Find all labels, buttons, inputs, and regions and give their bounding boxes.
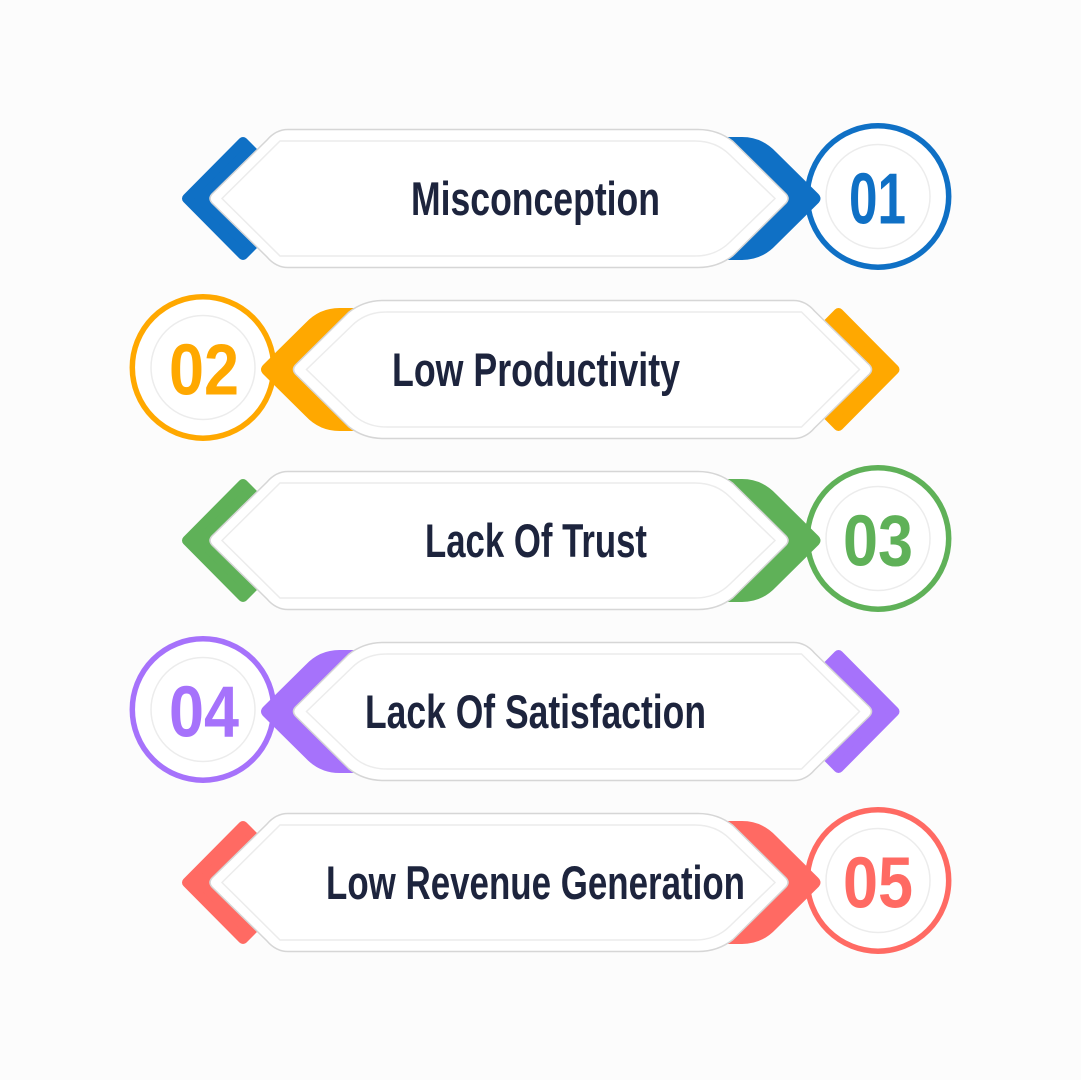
row 1: Misconception <box>187 126 949 268</box>
outer label frame <box>210 472 788 610</box>
right chevron <box>782 655 894 768</box>
row 3: Lack Of Trust <box>187 468 949 610</box>
inner label frame <box>222 483 775 598</box>
label: Low Revenue Generation <box>326 856 745 909</box>
number badge 01: 01 <box>849 160 906 240</box>
outer label frame <box>210 130 788 268</box>
shapes mirrored <box>261 300 894 438</box>
right chevron connector <box>700 821 820 944</box>
label: Misconception <box>411 172 660 225</box>
number badge 04 <box>132 639 274 780</box>
left chevron connector <box>261 650 382 773</box>
number badge 04: 04 <box>169 672 239 752</box>
inner label frame <box>222 825 775 940</box>
shapes mirrored <box>261 642 894 780</box>
row 4: Lack Of Satisfaction <box>132 639 895 780</box>
inner label frame <box>306 654 860 769</box>
number badge 03: 03 <box>843 502 913 582</box>
right chevron <box>782 313 894 426</box>
left chevron <box>187 142 299 255</box>
left chevron <box>187 484 299 597</box>
number badge 05 <box>807 810 949 951</box>
label: Lack Of Trust <box>425 514 647 567</box>
right chevron connector <box>700 479 820 602</box>
label: Low Productivity <box>392 343 680 396</box>
row 5: Low Revenue Generation <box>187 810 949 952</box>
number badge 02: 02 <box>169 330 239 410</box>
inner label frame <box>306 312 860 427</box>
number badge 05: 05 <box>843 844 913 924</box>
left chevron <box>187 826 299 939</box>
outer label frame <box>210 814 788 952</box>
shapes <box>187 814 820 952</box>
outer label frame <box>294 642 872 780</box>
outer label frame <box>294 300 872 438</box>
label: Lack Of Satisfaction <box>365 685 706 738</box>
row 2: Low Productivity <box>132 297 895 438</box>
number badge 01 <box>807 126 949 267</box>
shapes <box>187 472 820 610</box>
inner label frame <box>222 141 775 256</box>
number badge 02 <box>132 297 274 438</box>
left chevron connector <box>261 308 382 431</box>
right chevron connector <box>700 137 820 260</box>
number badge 03 <box>807 468 949 609</box>
